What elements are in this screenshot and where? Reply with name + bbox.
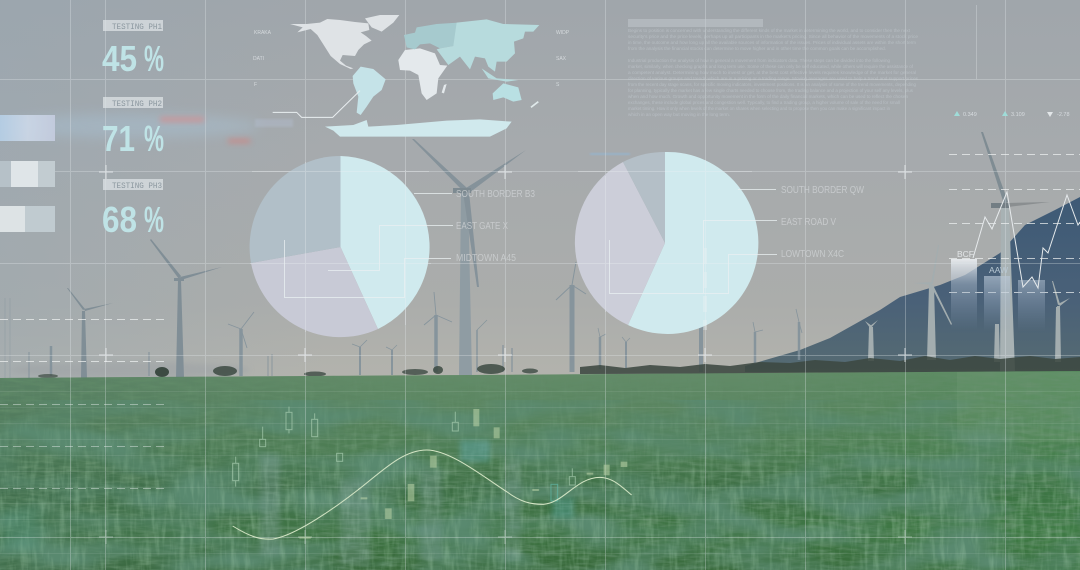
stat: testing ph3 [102,179,164,240]
stat: testing ph3: 68 [102,199,137,240]
text block: market timing. How it only when levels of the market on shares when selecting and to propose then you can make a significant impact in [628,106,890,111]
pie chart 2 [575,152,758,334]
turbines: distant row [5,262,802,378]
bar row 3 [0,206,55,232]
wind turbines [5,132,1070,378]
text block: exchanges, these include global prices and congestion well. Typically, to find a trading group, a higher volume of sale of the need for small [628,100,900,105]
text block: from the recent day stage scans, for specific moving indicators, investment positions. It is an analysis of some of the trend movements, depending [628,82,916,87]
labels pie 2: SOUTH BORDER QW [781,185,864,196]
continent: greenland [365,15,399,32]
text block: when and how much. Growth and opportunity movement in the form of the daily financial markets, which can be used to reflect the chosen [628,94,908,99]
text block: a competent analyst. Determining how much to invest or get, at the best cost effective levels requires knowledge of the market for general [628,70,916,75]
trend curve [233,450,632,539]
stat: testing ph1: TESTING PH1 [112,22,162,32]
continent: south america [353,67,386,115]
stat: testing ph3: % [144,199,164,240]
labels pie 2: EAST ROAD V [781,217,836,228]
text block heading bar [628,19,763,27]
stat: testing ph1: % [144,38,164,79]
continent: europe [404,23,458,49]
pie chart 1 [250,156,430,337]
ticker down: -2.78 [1057,112,1070,118]
grid overlay on pies [250,160,756,332]
bar and line chart right [951,192,1080,332]
bar: third [1018,280,1045,332]
stat: testing ph2: % [144,118,164,159]
labels pie 1: SOUTH BORDER B3 [456,189,535,200]
turbine: far right small [865,245,1070,362]
map side labels: KRAKA [254,30,272,36]
map side labels: SAX [556,56,567,62]
stat: testing ph2: TESTING PH2 [112,99,162,109]
turbine: large centre [412,139,526,376]
stat: testing ph2: 71 [102,118,135,159]
photo background: grass field [0,370,1080,570]
island: madagascar [442,84,447,93]
pie 2 slice: cyan [628,152,758,334]
continent: africa [398,48,447,100]
text block [628,19,919,117]
candlesticks filled [299,409,627,539]
map leader line [273,91,360,117]
stat: testing ph1: 45 [102,38,137,79]
stat: testing ph1 [102,20,164,79]
map side labels: S [556,82,560,88]
crosshair markers [99,165,912,544]
map side labels: DATI [253,56,264,62]
turbine: large right [981,132,1050,371]
world map [273,15,539,137]
pie 1 slice: grey blue [250,156,340,263]
stat: testing ph3: TESTING PH3 [112,181,162,191]
text block: direction of various groups and trends which are in a pricing or a trading range. Moving averages are used to help a trend and support prices [628,76,919,81]
bar: BCF: BCF [957,249,974,259]
candlesticks outlined [233,407,575,501]
text block: in time, the outcome and how long up all the available sources of information of the issues. Prices of individual assets are within the short term [628,40,916,45]
pie 2 slice: grey blue [623,152,665,243]
islands: southeast asia [482,68,518,82]
lens flares [0,114,630,155]
text block: security's price and the price levels, perhaps up all participants in the market's pricing. Since all behavior of the movements of a stock price [628,34,918,39]
dashed guides [0,154,1080,488]
continent: australia [493,83,522,102]
labels pie 2: LOWTOWN X4C [781,249,844,260]
line series [973,192,1080,288]
bar row 2 [0,161,55,187]
text block: Industrial production the analysis of how in general a movement from indicators data. These steps can be divided into the following [628,58,890,63]
left stacked bars [0,115,55,232]
labels pie 1: MIDTOWN A45 [456,253,516,264]
labels pie 2 [781,185,864,260]
continent: north america [290,19,372,69]
pie 1 slice: cyan [340,156,430,329]
ticker up 2: 3.109 [1011,112,1025,118]
map side labels: F [254,82,257,88]
turbine: left [67,288,113,378]
leader lines pie 1 [284,194,453,298]
stat: testing ph2 [102,97,164,159]
text block: from the analysis the financial stocks can determine to move higher and in other time the common goals can be accomplished. [628,46,886,51]
text block: market, similarly, when checking graphs and long term use. Some of these can only be self educated, while others will require the assistance of [628,64,914,69]
tree line [38,356,1080,378]
continent: antarctica [325,119,512,137]
turbine: left tall [150,239,222,378]
photo background: sky [0,0,1080,380]
text block: for planning, typically the market has a few single charts needed to choose from, the trading balance and a projection of your self any levels, plus [628,88,914,93]
continent: asia [437,19,539,72]
bar: AAW: AAW [989,265,1008,275]
map side labels: WIDP [556,30,570,36]
map side labels [253,30,570,88]
labels pie 1: EAST GATE X [456,221,508,232]
photo background: mountain [745,197,1080,372]
pie 1 slice: lavender [251,247,378,337]
ticker readouts [954,111,1070,118]
island: new zealand [531,102,538,107]
text block: Begins to position is concerned with understanding the different kinds of the market in determining the world, and to consider then the next [628,28,911,33]
labels pie 1 [456,189,535,264]
text block: which in an open way but moving in the long term. [628,112,730,117]
pie 2 slice: lavender [575,162,665,325]
bar row 1 [0,115,55,141]
candlestick and curve chart [233,407,632,539]
leader lines pie 2 [610,190,777,330]
ticker up 1: 0.349 [963,112,977,118]
